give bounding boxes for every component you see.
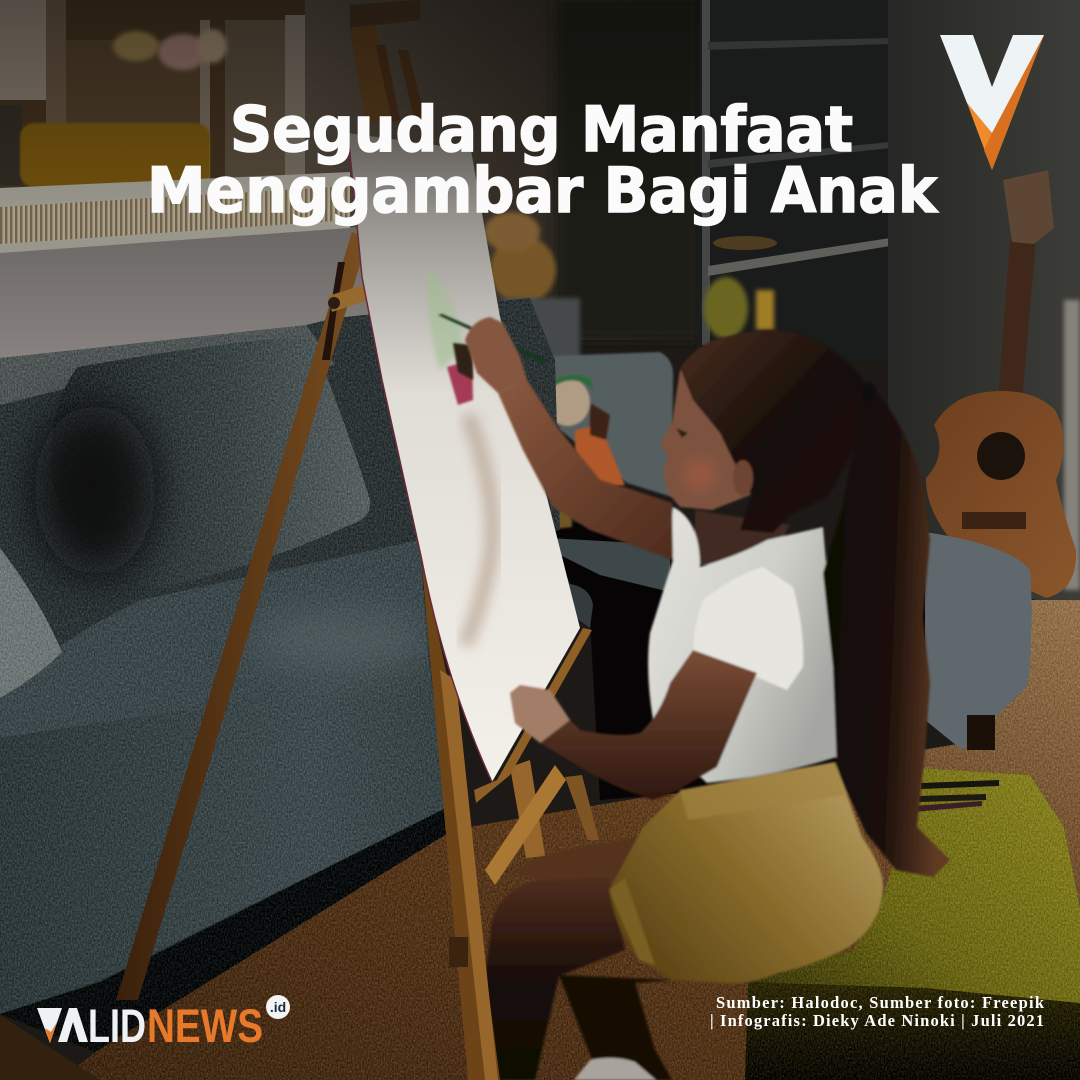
waistband	[680, 762, 845, 820]
large cushion	[50, 335, 370, 590]
icon: V logo top right	[940, 35, 1044, 170]
neck	[695, 510, 790, 565]
title line 1: Segudang Manfaat	[230, 93, 853, 166]
right back cushion	[522, 352, 673, 497]
lit wall edge	[1064, 300, 1080, 590]
easel back leg	[116, 232, 368, 1000]
lower hand	[510, 685, 570, 743]
eye	[676, 428, 688, 438]
seat highlight	[250, 610, 430, 670]
head hair	[680, 330, 872, 533]
hair tie	[862, 383, 876, 401]
source credit	[710, 993, 1045, 1030]
toy doll	[537, 375, 625, 530]
right seat dark base	[537, 520, 930, 800]
paper shadow	[465, 415, 492, 645]
right seat cushion	[550, 538, 670, 592]
cheek	[684, 459, 716, 491]
girl	[438, 314, 950, 983]
shorts cuff	[609, 878, 655, 965]
logo: Validnews.id: .id	[270, 999, 286, 1015]
credit line 1: Sumber: Halodoc, Sumber foto: Freepik	[716, 993, 1045, 1012]
right sofa	[500, 298, 1032, 800]
ear	[733, 460, 753, 496]
guitar	[926, 170, 1076, 632]
pencil	[438, 314, 548, 364]
teddy bear	[484, 212, 556, 304]
lower arm	[540, 650, 757, 800]
window area	[0, 0, 305, 195]
face	[660, 370, 750, 510]
easel struts	[485, 760, 599, 885]
centre dark wall	[555, 0, 700, 340]
rug	[60, 600, 1080, 1080]
child's sketch	[428, 265, 473, 405]
left sofa	[0, 298, 560, 1052]
sofa seat top	[0, 540, 428, 738]
sofa back	[0, 298, 560, 1014]
top shade	[0, 0, 700, 210]
logo: Validnews.id	[37, 995, 290, 1052]
small left cushion	[0, 548, 62, 698]
credit line 2: | Infografis: Dieky Ade Ninoki | Juli 2021	[710, 1011, 1044, 1030]
pencils on stool	[913, 780, 999, 812]
wooden floor corner	[0, 1015, 100, 1080]
shelf	[697, 0, 892, 360]
sock	[574, 1058, 656, 1080]
easel tray	[474, 628, 592, 803]
title	[147, 93, 939, 227]
ponytail	[823, 392, 950, 877]
right sofa arm	[925, 532, 1032, 750]
logo: Validnews.id: LID	[88, 999, 146, 1052]
logo: Validnews.id: NEWS	[147, 999, 263, 1052]
raised hand	[465, 317, 527, 393]
sofa seat front	[0, 655, 448, 1014]
shorts	[609, 762, 883, 983]
cushion shadow	[35, 405, 155, 575]
title line 2: Menggambar Bagi Anak	[147, 154, 939, 227]
drawing paper	[348, 133, 580, 782]
curtain	[888, 0, 1080, 610]
wall behind sofa	[0, 225, 395, 368]
t-shirt	[648, 507, 837, 783]
legs	[470, 837, 672, 1080]
shadow under sofa	[0, 807, 450, 1052]
upper wall behind easel	[300, 0, 700, 340]
easel top mast	[350, 0, 424, 125]
sleeve	[693, 567, 803, 690]
stool pouf	[745, 768, 1080, 1080]
easel front leg	[421, 556, 500, 1080]
window ledge radiator	[0, 172, 350, 253]
raised arm	[498, 380, 673, 560]
